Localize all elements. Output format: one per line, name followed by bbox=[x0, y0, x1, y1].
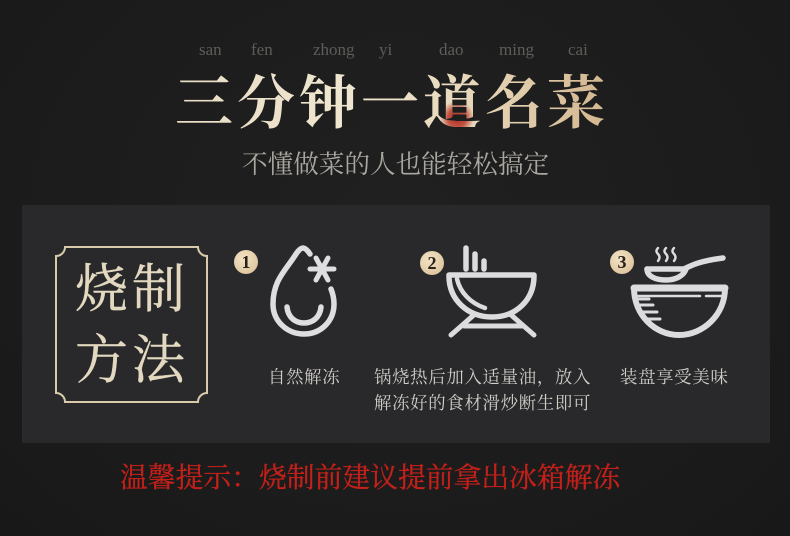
frame with notched corners bbox=[55, 246, 208, 403]
pinyin line: yi bbox=[379, 40, 392, 59]
pinyin line: fen bbox=[251, 40, 273, 59]
pinyin line: san bbox=[199, 40, 222, 59]
pinyin line bbox=[199, 40, 588, 59]
pinyin line: cai bbox=[568, 40, 588, 59]
icon: wok on stove bbox=[446, 245, 537, 338]
step 3 caption: 装盘享受美味 bbox=[620, 367, 729, 387]
panel: cooking method bbox=[22, 205, 770, 443]
pinyin line: zhong bbox=[313, 40, 355, 59]
pinyin line: ming bbox=[499, 40, 534, 59]
step 2 caption: 锅烧热后加入适量油，放入 bbox=[374, 367, 591, 387]
icon: water drop with snowflake bbox=[270, 245, 337, 337]
step 1 number bbox=[234, 250, 258, 274]
step 3 number: 3 bbox=[618, 252, 626, 272]
badge: method frame bbox=[55, 246, 208, 403]
subtitle: 不懂做菜的人也能轻松搞定 bbox=[242, 150, 549, 179]
step 2 number: 2 bbox=[428, 253, 436, 273]
pinyin line: dao bbox=[439, 40, 464, 59]
icon: bowl and spoon bbox=[630, 246, 728, 338]
warning tip: 温馨提示：烧制前建议提前拿出冰箱解冻 bbox=[120, 463, 620, 494]
frame heading: 烧制方法 bbox=[75, 261, 189, 390]
step 2 caption bbox=[374, 367, 591, 412]
step 2 number bbox=[420, 251, 444, 275]
step 1 caption: 自然解冻 bbox=[268, 367, 340, 387]
step 3 number bbox=[610, 250, 634, 274]
step 2 caption: 解冻好的食材滑炒断生即可 bbox=[374, 392, 591, 412]
step 1 number: 1 bbox=[242, 252, 250, 272]
